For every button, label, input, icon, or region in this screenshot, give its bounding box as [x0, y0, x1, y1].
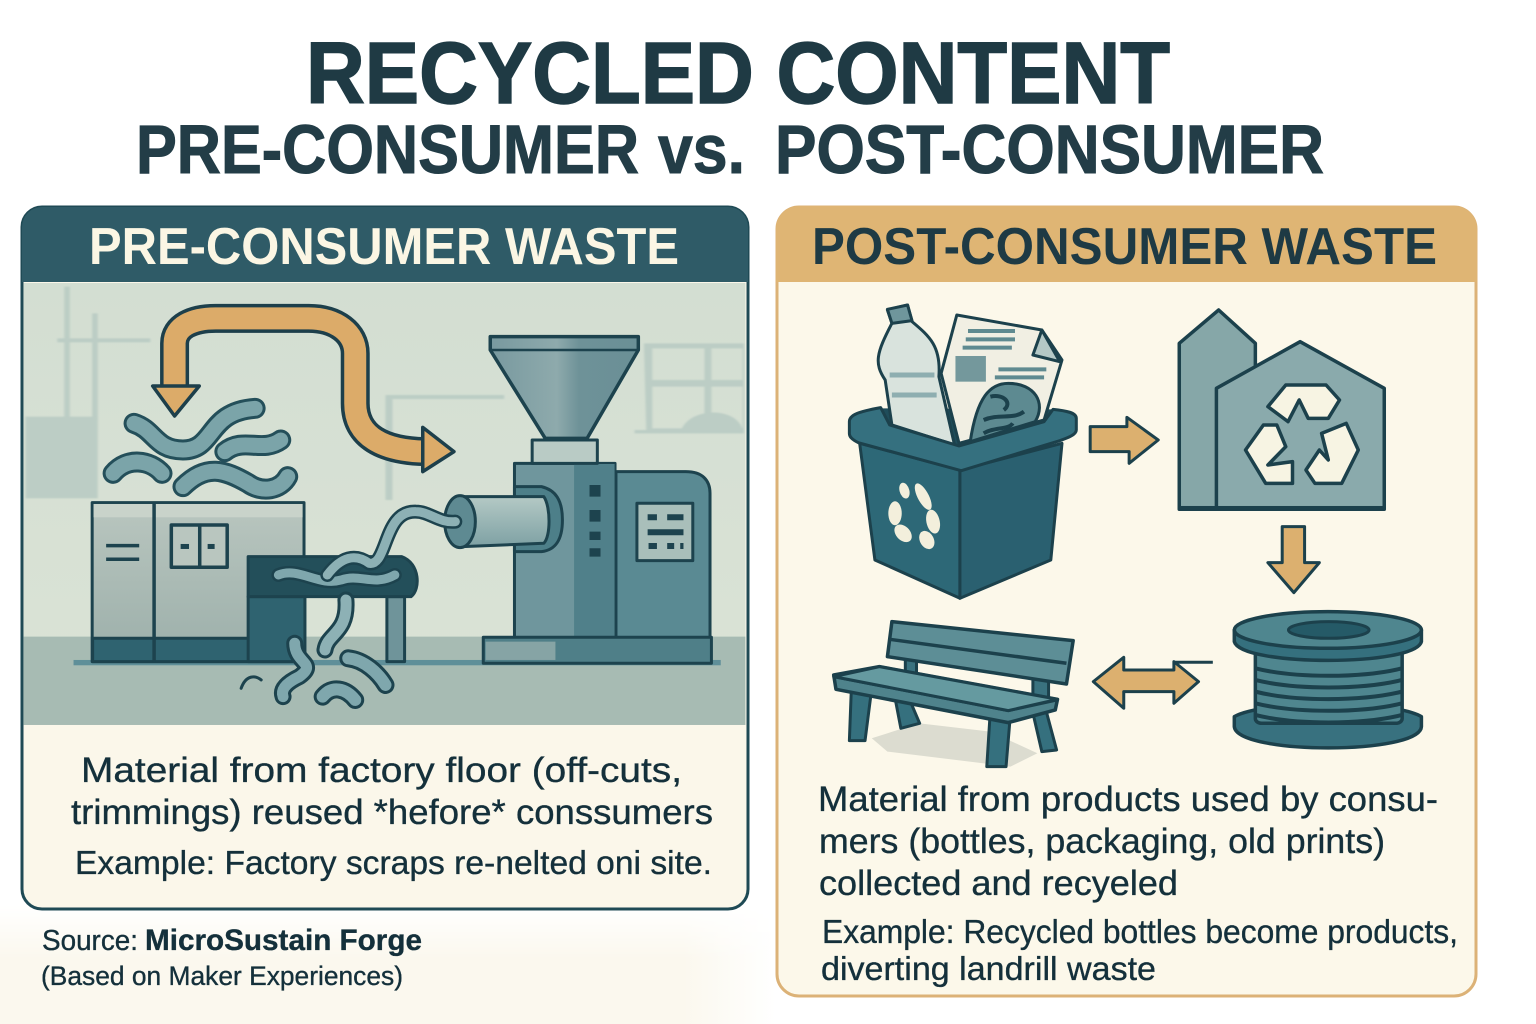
panel description	[818, 780, 1458, 987]
arrow: factory to filament	[1268, 527, 1319, 593]
panel description: collected and recyeled	[819, 864, 1178, 903]
subtitle	[136, 111, 1324, 188]
panel: pre-consumer waste	[22, 207, 748, 909]
panel description: Example: Recycled bottles become products,	[822, 913, 1458, 950]
floor	[24, 637, 745, 725]
waste scraps	[113, 408, 288, 489]
source credit: (Based on Maker Experiences)	[41, 961, 403, 991]
subtitle: vs.	[658, 111, 745, 188]
panel body	[777, 207, 1476, 996]
panel header	[22, 207, 748, 282]
melted strands	[241, 512, 455, 700]
panel heading: POST-CONSUMER WASTE	[812, 218, 1437, 276]
panel header	[776, 206, 1477, 282]
recycling bin	[849, 305, 1076, 598]
illustration background	[24, 283, 745, 725]
faded factory background	[26, 287, 744, 500]
panel description	[71, 751, 713, 881]
park bench	[834, 622, 1073, 767]
panel description: diverting landrill waste	[821, 950, 1156, 987]
left machine	[92, 503, 304, 662]
extruder	[445, 337, 711, 663]
panel description: trimmings) reused *hefore* conssumers	[71, 793, 713, 832]
illustration: factory reuse loop	[24, 283, 745, 725]
main title: RECYCLED CONTENT	[306, 25, 1170, 122]
source credit	[41, 924, 422, 991]
illustration: recycling flow	[834, 305, 1421, 767]
page footer cream wash	[0, 932, 732, 1024]
panel: post-consumer waste	[776, 206, 1477, 996]
panel description: Example: Factory scraps re-nelted oni site.	[75, 844, 712, 881]
panel body	[22, 207, 748, 909]
subtitle: PRE-CONSUMER	[136, 111, 639, 188]
recycling plant	[1179, 310, 1384, 509]
conveyor	[248, 557, 417, 662]
arrow: bin to factory	[1090, 417, 1158, 463]
source credit: Source:	[42, 925, 138, 957]
filament spool	[1234, 612, 1421, 748]
arrow: filament to bench	[1093, 657, 1213, 708]
panel description: mers (bottles, packaging, old prints)	[819, 822, 1385, 861]
panel heading: PRE-CONSUMER WASTE	[89, 218, 679, 276]
source credit: MicroSustain Forge	[145, 924, 422, 957]
panel description: Material from factory floor (off-cuts,	[81, 751, 682, 790]
arrow: scrap loop	[153, 318, 454, 472]
subtitle: POST-CONSUMER	[775, 111, 1324, 188]
panel description: Material from products used by consu-	[818, 780, 1438, 819]
title	[136, 25, 1324, 188]
